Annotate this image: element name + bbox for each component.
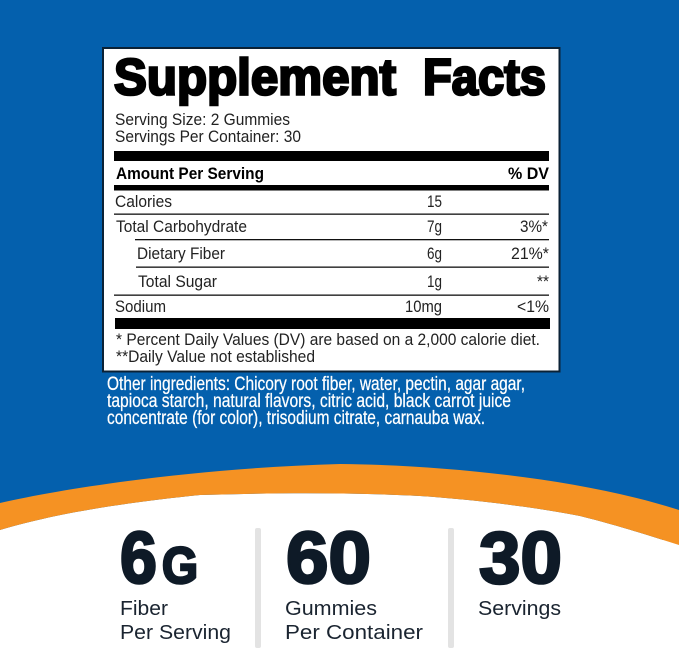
stat: 60 gummies: 60 bbox=[286, 518, 371, 599]
footnotes: **Daily Value not established bbox=[116, 348, 315, 366]
stat: 60 gummies bbox=[285, 518, 423, 644]
row: total carbohydrate: 7g bbox=[427, 218, 442, 236]
divider bbox=[448, 528, 454, 648]
stat: 30 servings: 30 bbox=[479, 518, 562, 599]
thick rule bbox=[114, 151, 549, 161]
other ingredients text bbox=[107, 373, 525, 429]
stat: 30 servings: Servings bbox=[478, 598, 561, 620]
table header: Amount Per Serving bbox=[116, 165, 264, 183]
divider bbox=[255, 528, 261, 648]
stat: 60 gummies: Gummies bbox=[285, 598, 377, 620]
row: calories bbox=[115, 193, 442, 211]
orange curved band bbox=[0, 464, 679, 545]
stat: 6g fiber: 6 bbox=[120, 518, 157, 599]
row: dietary fiber: Dietary Fiber bbox=[137, 245, 225, 263]
footnotes bbox=[116, 331, 540, 366]
panel background bbox=[103, 48, 560, 372]
title: Supplement bbox=[114, 48, 396, 106]
serving info: Servings Per Container: 30 bbox=[115, 128, 301, 146]
row: total carbohydrate: Total Carbohydrate bbox=[116, 218, 247, 236]
row: total sugar: ** bbox=[537, 273, 550, 291]
row: dietary fiber bbox=[137, 245, 550, 263]
title: Facts bbox=[423, 48, 546, 106]
row: sodium: <1% bbox=[517, 298, 549, 316]
row: calories: Calories bbox=[115, 193, 172, 211]
row: total sugar: 1g bbox=[427, 273, 442, 291]
table header: % DV bbox=[508, 165, 549, 183]
other ingredients text: tapioca starch, natural flavors, citric acid, black carrot juice bbox=[107, 390, 511, 412]
panel: supplement facts bbox=[103, 48, 560, 372]
white bottom area bbox=[0, 493, 679, 650]
row: dietary fiber: 21%* bbox=[511, 245, 550, 263]
row: total carbohydrate bbox=[116, 218, 549, 236]
row: sodium bbox=[115, 298, 549, 316]
row: total sugar bbox=[138, 273, 550, 291]
other ingredients text: Other ingredients: Chicory root fiber, water, pectin, agar agar, bbox=[107, 373, 525, 395]
row: calories: 15 bbox=[427, 193, 442, 211]
table header bbox=[116, 165, 549, 183]
serving info bbox=[115, 111, 301, 146]
title bbox=[114, 48, 546, 106]
row: sodium: Sodium bbox=[115, 298, 166, 316]
footnotes: * Percent Daily Values (DV) are based on a 2,000 calorie diet. bbox=[116, 331, 540, 349]
row: sodium: 10mg bbox=[405, 298, 442, 316]
row: total sugar: Total Sugar bbox=[138, 273, 217, 291]
stat: 60 gummies: Per Container bbox=[285, 622, 423, 644]
row: dietary fiber: 6g bbox=[427, 245, 442, 263]
stat: 6g fiber bbox=[120, 518, 231, 644]
stat: 6g fiber: Fiber bbox=[120, 598, 168, 620]
other ingredients text: concentrate (for color), trisodium citrate, carnauba wax. bbox=[107, 407, 485, 429]
stat: 6g fiber: Per Serving bbox=[120, 622, 231, 644]
stat: 6g fiber: G bbox=[162, 537, 198, 594]
serving info: Serving Size: 2 Gummies bbox=[115, 111, 290, 129]
row: total carbohydrate: 3%* bbox=[520, 218, 549, 236]
